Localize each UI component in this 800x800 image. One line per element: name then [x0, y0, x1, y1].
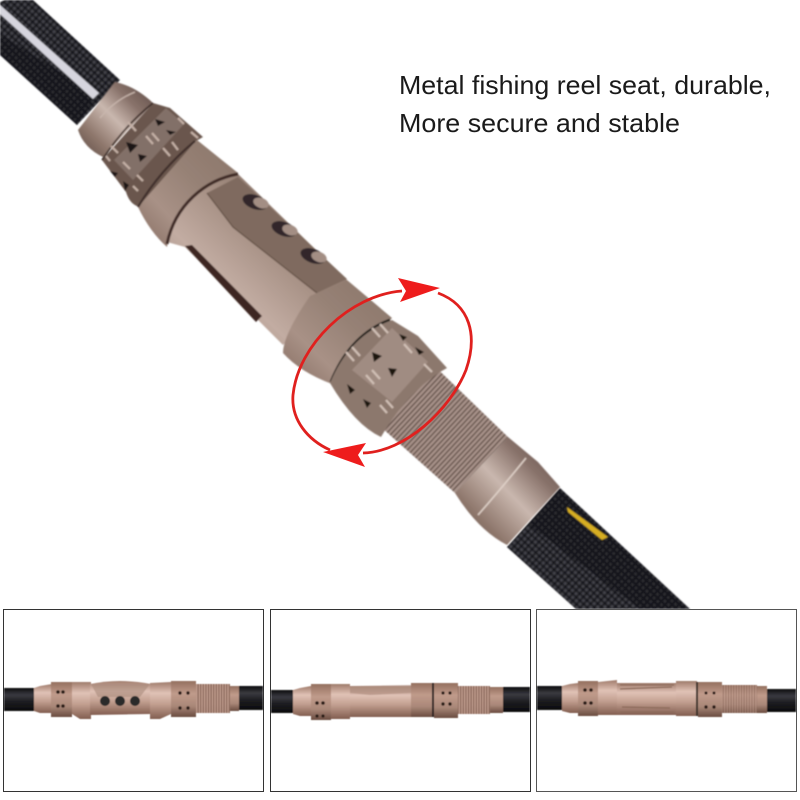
caption line 1: Metal fishing reel seat, durable, — [399, 70, 771, 100]
arc: upper left — [293, 291, 402, 450]
arc: lower right — [363, 293, 471, 453]
end collar — [455, 437, 560, 545]
lower knurled ring — [330, 320, 447, 437]
panel: variant 2 smooth — [270, 610, 530, 792]
panel frame — [270, 610, 530, 792]
panel frame — [4, 610, 264, 792]
main fishing rod photo — [0, 0, 690, 609]
upper knurled ring — [102, 103, 203, 207]
arrowhead: lower — [323, 443, 366, 467]
lower collar — [283, 280, 392, 384]
rod and seat 2 — [271, 683, 530, 720]
neck collar with arc edge — [138, 140, 238, 247]
rod and seat 1 — [4, 681, 263, 719]
reel seat handle body — [167, 174, 347, 345]
rotation arrows — [293, 278, 471, 467]
panel frame — [536, 610, 796, 792]
gold label — [567, 507, 608, 540]
caption line 2: More secure and stable — [399, 108, 680, 138]
upper carbon rod — [0, 0, 120, 125]
panel: variant 1 with holes — [4, 610, 264, 792]
lower carbon rod — [507, 488, 690, 609]
panel: variant 3 grooved — [536, 610, 796, 792]
upper collar — [78, 82, 153, 157]
threaded section — [364, 352, 508, 493]
rod and seat 3 — [537, 680, 796, 717]
caption text — [399, 70, 771, 138]
arrowhead: upper — [398, 278, 440, 302]
